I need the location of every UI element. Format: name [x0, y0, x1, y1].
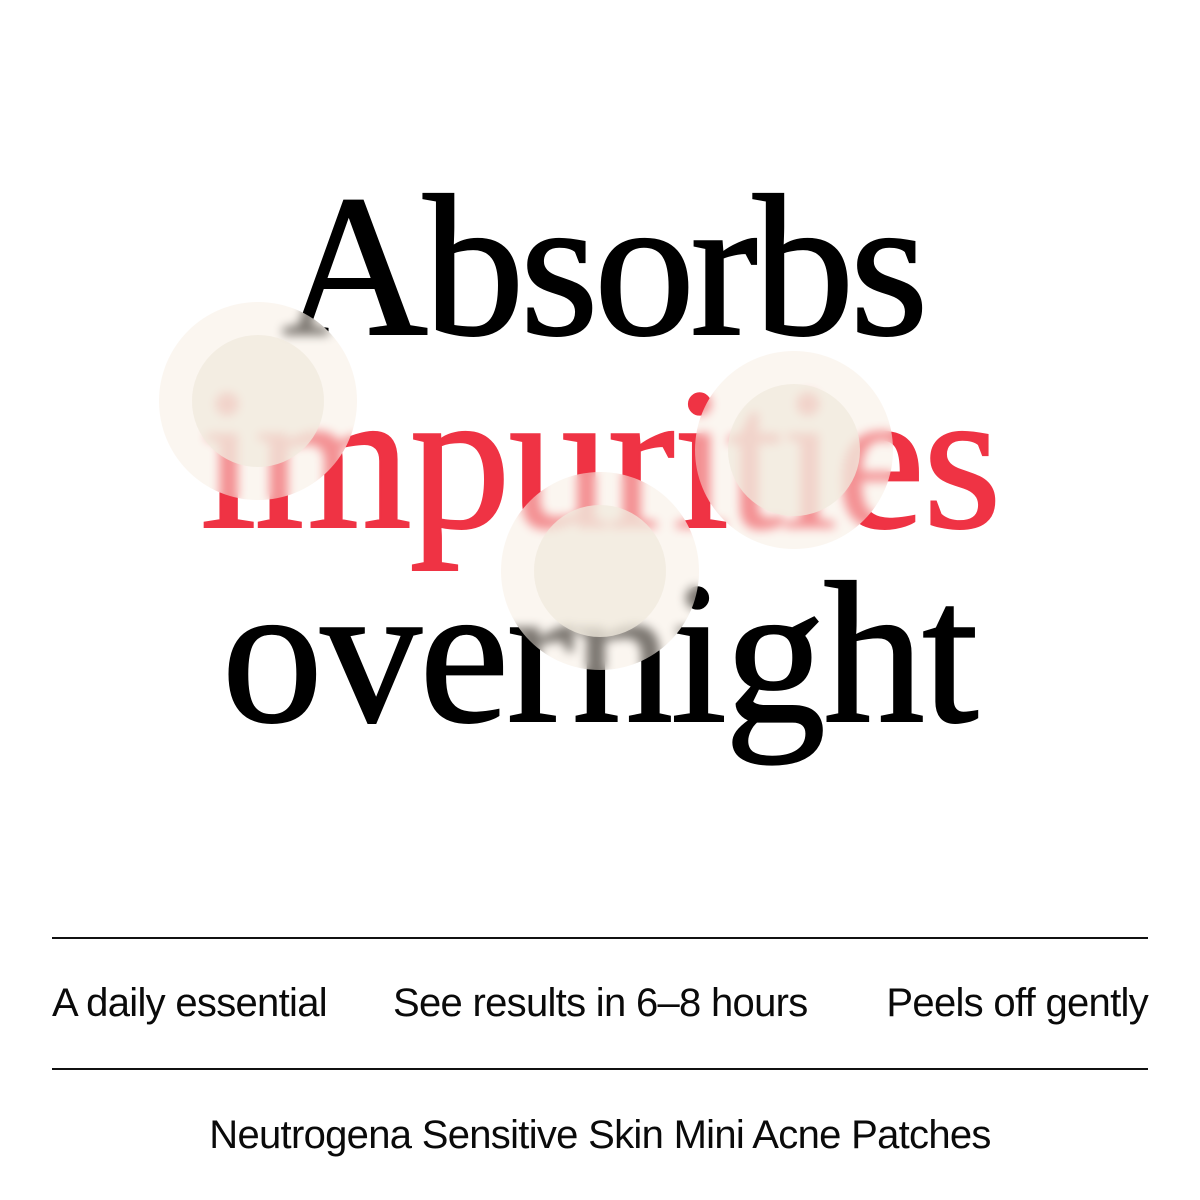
benefit: daily essential: A daily essential [52, 981, 327, 1025]
headline [200, 154, 1000, 766]
headline line: impurities: impurities [200, 347, 1000, 571]
product name: Neutrogena Sensitive Skin Mini Acne Patches [209, 1113, 991, 1157]
benefit: results time: See results in 6–8 hours [393, 981, 808, 1025]
patch: left [159, 302, 357, 500]
headline line: overnight: overnight [222, 541, 976, 765]
patch: centre [501, 472, 699, 670]
benefits row [52, 937, 1149, 1070]
headline line: Absorbs: Absorbs [282, 154, 924, 378]
benefit: peels off: Peels off gently [886, 981, 1148, 1025]
patch: right [695, 351, 893, 549]
